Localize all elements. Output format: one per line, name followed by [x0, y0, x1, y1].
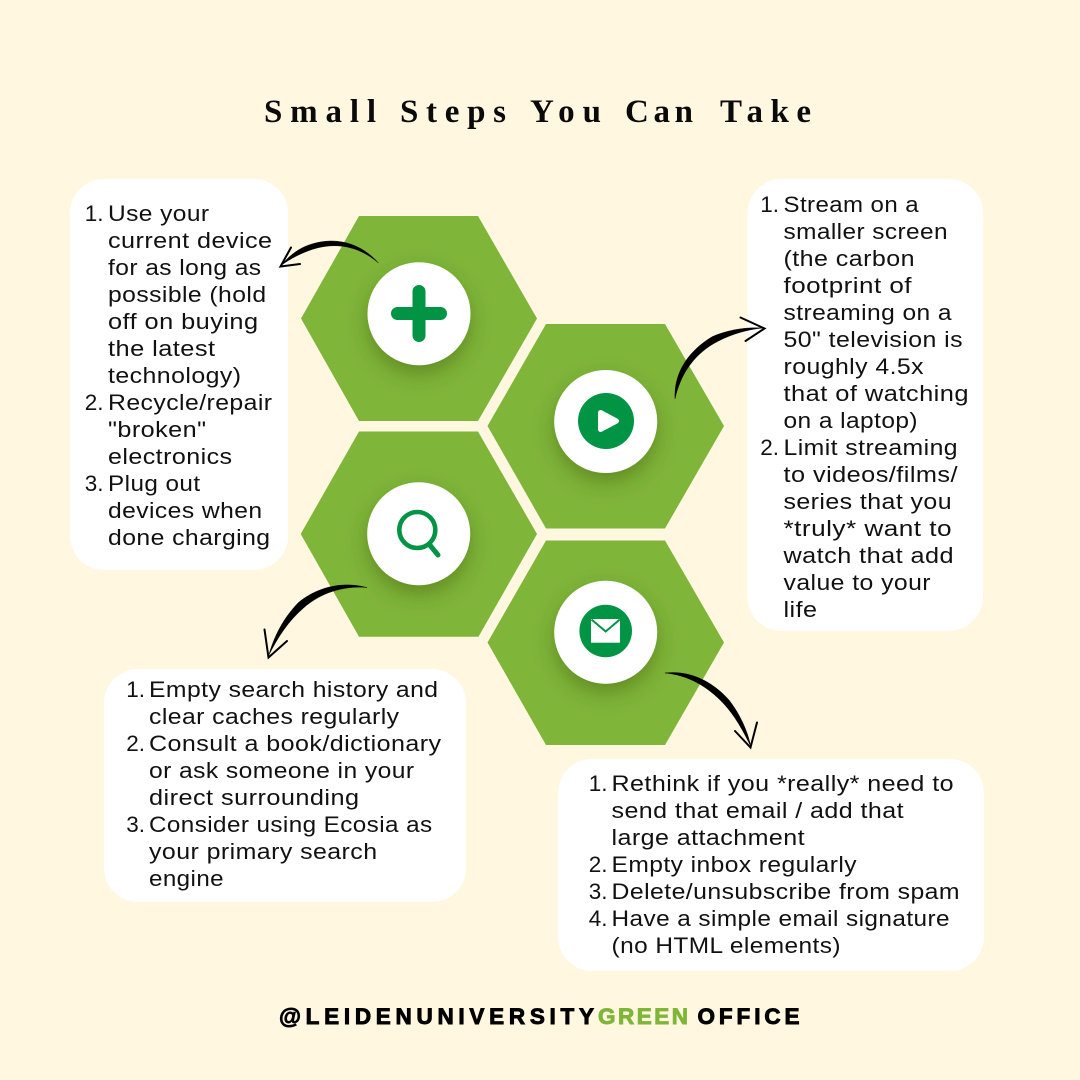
panel: device tips: 3.: [85, 471, 104, 496]
panel: search tips: Consider using Ecosia as: [149, 812, 432, 837]
panel: device tips: 1.: [85, 201, 104, 226]
panel: streaming tips: 1.: [760, 192, 779, 217]
title: Can: [625, 94, 693, 130]
hexagon: devices: [301, 216, 537, 421]
panel: search tips: direct surrounding: [149, 785, 360, 810]
panel: streaming tips: 2.: [760, 435, 779, 460]
panel: email tips: (no HTML elements): [612, 933, 841, 958]
panel: email tips: Rethink if you *really* need to: [612, 771, 954, 796]
panel: streaming tips: watch that add: [782, 543, 954, 568]
footer handle: GREEN: [598, 1004, 688, 1029]
panel: streaming tips: life: [784, 597, 818, 622]
panel: streaming tips: (the carbon: [784, 246, 915, 271]
panel: streaming tips: series that you: [784, 489, 952, 514]
footer handle: @LEIDENUNIVERSITY: [279, 1004, 594, 1029]
panel: device tips: devices when: [108, 498, 262, 523]
panel: streaming tips: Stream on a: [784, 192, 919, 217]
arrow: play to streaming tips: [675, 318, 764, 399]
panel: streaming tips: streaming on a: [784, 300, 952, 325]
panel: device tips: for as long as: [108, 255, 262, 280]
panel: streaming tips: 50" television is: [784, 327, 963, 352]
hexagon: search: [301, 432, 537, 637]
panel: device tips: "broken": [108, 417, 206, 442]
hexagon: email: [488, 540, 724, 745]
title: Steps: [400, 94, 506, 130]
panel: device tips: possible (hold: [108, 282, 266, 307]
panel: search tips: or ask someone in your: [149, 758, 415, 783]
arrow: search to search tips: [264, 585, 367, 658]
title: Small: [264, 94, 376, 130]
panel: device tips: Recycle/repair: [108, 390, 273, 415]
panel: email tips: Empty inbox regularly: [612, 852, 857, 877]
panel: search tips: 3.: [126, 812, 145, 837]
panel: email tips: large attachment: [612, 825, 805, 850]
footer handle: OFFICE: [698, 1004, 800, 1029]
panel: device tips: off on buying: [108, 309, 258, 334]
panel: search tips: engine: [149, 866, 224, 891]
panel: email tips: send that email / add that: [612, 798, 904, 823]
panel: email tips: Have a simple email signature: [612, 906, 950, 931]
hexagon: streaming: [488, 324, 724, 528]
icon: play: [554, 370, 657, 473]
panel: device tips: Plug out: [108, 471, 201, 496]
title: [264, 94, 811, 130]
title: Take: [720, 94, 811, 130]
panel: streaming tips: to videos/films/: [784, 462, 958, 487]
panel: search tips: 2.: [126, 731, 145, 756]
panel: device tips: electronics: [108, 444, 232, 469]
icon: magnifying glass: [367, 482, 470, 585]
panel: search tips: Empty search history and: [149, 677, 438, 702]
panel: streaming tips: *truly* want to: [784, 516, 952, 541]
panel: email tips: [558, 759, 984, 971]
panel: streaming tips: value to your: [784, 570, 931, 595]
panel: device tips: current device: [108, 228, 272, 253]
panel: device tips: [70, 179, 288, 570]
icon: plus: [368, 262, 470, 365]
panel: device tips: 2.: [85, 390, 104, 415]
panel: streaming tips: smaller screen: [784, 219, 948, 244]
panel: streaming tips: that of watching: [784, 381, 969, 406]
panel: device tips: done charging: [108, 525, 270, 550]
title: You: [530, 94, 601, 130]
arrow: email to email tips: [665, 673, 757, 748]
panel: search tips: Consult a book/dictionary: [149, 731, 442, 756]
footer handle: [279, 1004, 800, 1029]
arrow: plus to device tips: [280, 241, 378, 266]
panel: streaming tips: roughly 4.5x: [784, 354, 924, 379]
icon: envelope: [554, 581, 657, 684]
panel: streaming tips: [748, 179, 983, 631]
panel: device tips: Use your: [108, 201, 210, 226]
panel: search tips: [104, 669, 466, 902]
panel: search tips: 1.: [126, 677, 145, 702]
panel: search tips: your primary search: [149, 839, 378, 864]
panel: streaming tips: on a laptop): [784, 408, 918, 433]
panel: search tips: clear caches regularly: [149, 704, 400, 729]
panel: device tips: technology): [108, 363, 242, 388]
panel: email tips: 2.: [589, 852, 608, 877]
panel: email tips: Delete/unsubscribe from spam: [612, 879, 960, 904]
panel: email tips: 3.: [589, 879, 608, 904]
panel: email tips: 4.: [589, 906, 608, 931]
panel: streaming tips: Limit streaming: [784, 435, 958, 460]
panel: device tips: the latest: [108, 336, 216, 361]
panel: streaming tips: footprint of: [784, 273, 912, 298]
panel: email tips: 1.: [589, 771, 608, 796]
